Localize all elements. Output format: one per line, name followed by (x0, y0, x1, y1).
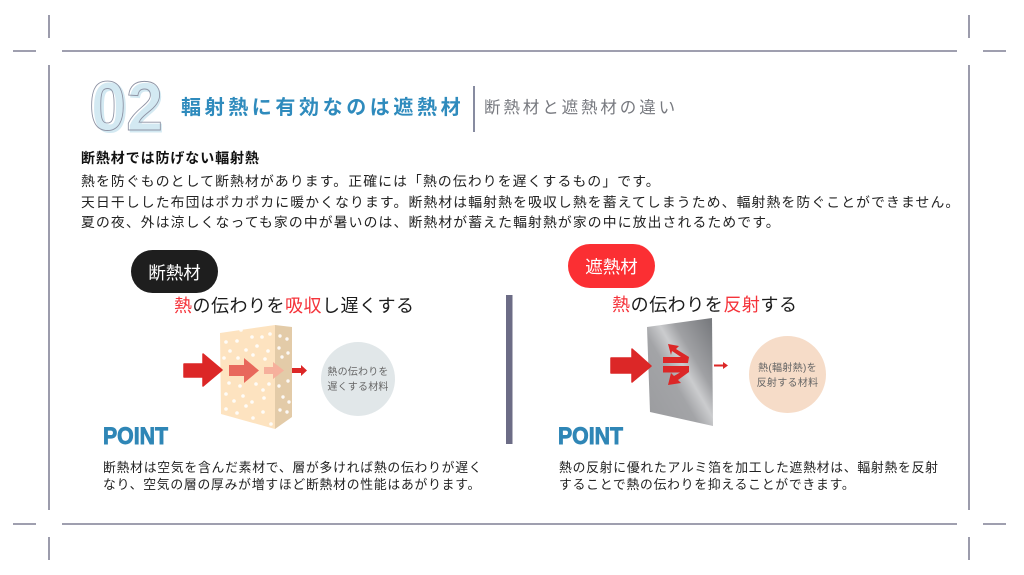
intro text block: 天日干しした布団はポカポカに暖かくなります。断熱材は輻射熱を吸収し熱を蓄えてしまうため、輻射熱を防ぐことができません。 (81, 194, 960, 210)
paragraph: left: なり、空気の層の厚みが増すほど断熱材の性能はあがります。 (103, 477, 481, 492)
circle callout: left: 遅くする材料 (327, 382, 389, 393)
subtitle: 断熱材と遮熱材の違い (484, 99, 678, 117)
circle callout: left (321, 342, 395, 416)
intro text block: 夏の夜、外は涼しくなっても家の中が暑いのは、断熱材が蓄えた輻射熱が家の中に放出されるためです。 (81, 215, 781, 230)
paragraph: left: 断熱材は空気を含んだ素材で、層が多ければ熱の伝わりが遅く (103, 460, 482, 475)
number 02: 02 (92, 69, 164, 147)
section heading: 断熱材では防げない輻射熱 (81, 150, 260, 166)
circle callout: left: 熱の伝わりを (327, 367, 389, 378)
paragraph: right (559, 460, 939, 492)
heading: absorb: 熱の伝わりを吸収し遅くする (174, 296, 414, 316)
paragraph: right: 熱の反射に優れたアルミ箔を加工した遮熱材は、輻射熱を反射 (559, 460, 939, 475)
heading: reflect: 熱の伝わりを反射する (612, 295, 798, 315)
label pill: 遮熱材 (568, 244, 655, 288)
label pill: 断熱材 (131, 250, 218, 293)
label pill: 断熱材: 断熱材 (148, 263, 201, 283)
main title: 輻射熱に有効なのは遮熱材 (181, 97, 464, 119)
number 02: 02 (89, 67, 163, 145)
paragraph: left (103, 460, 482, 492)
circle callout: right: 反射する材料 (757, 378, 818, 389)
POINT label: right: POINT (558, 423, 623, 450)
label pill: 遮熱材: 遮熱材 (585, 257, 638, 277)
intro text block: 熱を防ぐものとして断熱材があります。正確には「熱の伝わりを遅くするもの」です。 (81, 174, 661, 189)
circle callout: right: 熱(輻射熱)を (758, 363, 817, 374)
POINT label: left: POINT (103, 423, 168, 450)
circle callout: right (749, 336, 826, 413)
icon: reflected arrows (663, 344, 689, 385)
intro text block (81, 174, 960, 230)
paragraph: right: することで熱の伝わりを抑えることができます。 (559, 477, 855, 492)
